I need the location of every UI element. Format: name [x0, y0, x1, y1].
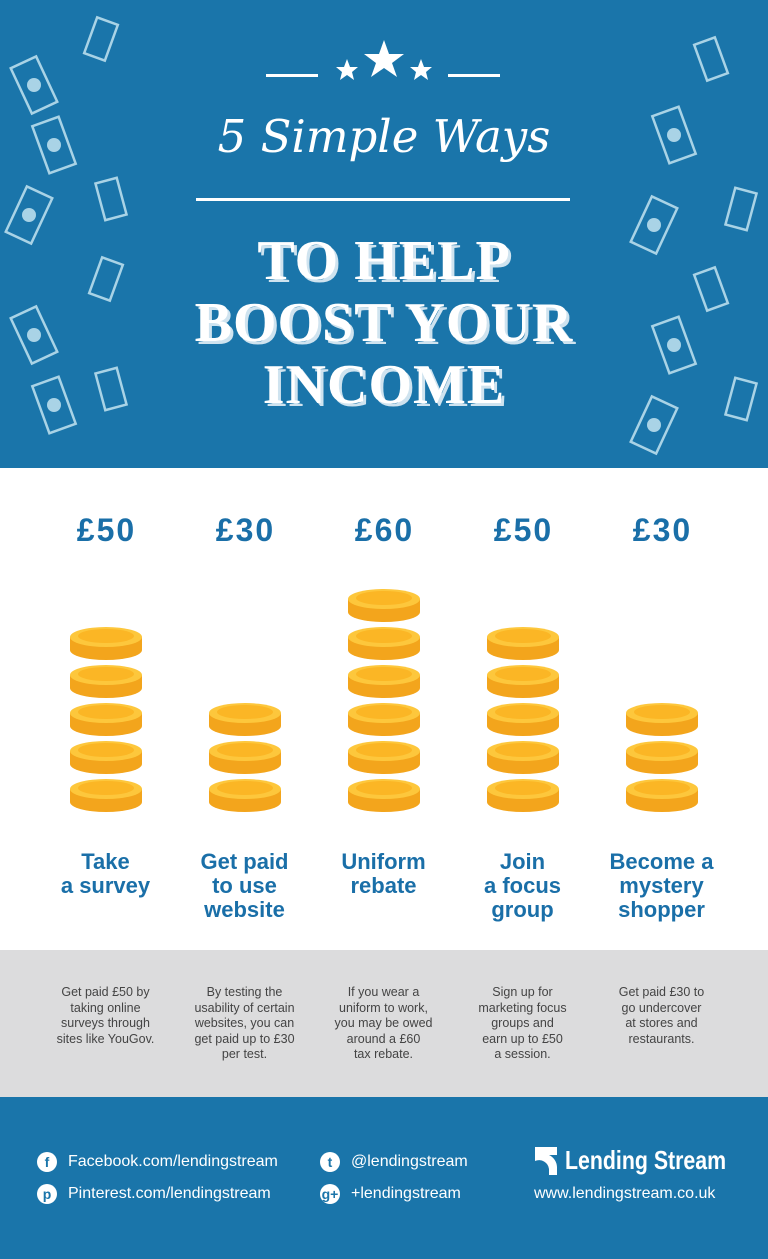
pinterest: [37, 1184, 57, 1204]
text: uniform to work,: [339, 1000, 428, 1014]
text: £60: [355, 512, 414, 548]
text: taking online: [70, 1000, 141, 1014]
text: £30: [216, 512, 275, 548]
text: get paid up to £30: [194, 1032, 295, 1046]
google plus: [320, 1184, 340, 1204]
text: website: [204, 897, 285, 922]
footer: [0, 1097, 768, 1259]
footer: Pinterest.com/lendingstream: [68, 1185, 271, 1202]
text: By testing the: [207, 985, 282, 999]
logo: Lending Stream: [565, 1145, 726, 1175]
text: £50: [494, 512, 553, 548]
text: rebate: [350, 873, 417, 898]
text: Get paid: [200, 849, 288, 874]
stars ornament: [266, 40, 500, 80]
text: £30: [633, 512, 692, 548]
facebook: f: [45, 1154, 49, 1170]
google plus: g+: [322, 1186, 338, 1202]
pinterest: p: [43, 1186, 51, 1202]
text: groups and: [491, 1016, 554, 1030]
text: group: [491, 897, 554, 922]
text: to use: [212, 873, 277, 898]
text: marketing focus: [478, 1000, 567, 1014]
text: at stores and: [625, 1016, 698, 1030]
labels: a survey: [61, 873, 150, 898]
footer: @lendingstream: [351, 1153, 468, 1170]
text: a session.: [494, 1047, 551, 1061]
text: Get paid £50 by: [61, 985, 150, 999]
text: Become a: [610, 849, 713, 874]
labels: Take: [81, 849, 130, 874]
main title: TO HELP: [257, 230, 511, 292]
labels: [61, 849, 150, 898]
description band: [0, 950, 768, 1097]
text: you may be owed: [334, 1016, 432, 1030]
prices: £50: [77, 512, 136, 548]
text: surveys through: [61, 1016, 150, 1030]
coin stacks chart: [70, 589, 698, 812]
decorative money bills: [4, 16, 758, 456]
twitter: t: [328, 1154, 332, 1170]
text: Uniform: [341, 849, 426, 874]
text: sites like YouGov.: [57, 1032, 154, 1046]
twitter: [320, 1152, 340, 1172]
text: per test.: [222, 1047, 267, 1061]
text: usability of certain: [194, 1000, 295, 1014]
footer: +lendingstream: [351, 1185, 461, 1202]
text: earn up to £50: [482, 1032, 563, 1046]
text: websites, you can: [195, 1016, 294, 1030]
text: If you wear a: [348, 985, 419, 999]
website: www.lendingstream.co.uk: [534, 1185, 715, 1202]
text: around a £60: [347, 1032, 420, 1046]
text: tax rebate.: [354, 1047, 413, 1061]
text: Get paid £30 to: [619, 985, 704, 999]
text: Sign up for: [492, 985, 553, 999]
main title: INCOME: [263, 354, 505, 416]
main title: [195, 230, 576, 416]
main title: BOOST YOUR: [195, 292, 573, 354]
header banner: [0, 0, 768, 468]
text: shopper: [618, 897, 705, 922]
facebook: [37, 1152, 57, 1172]
subtitle: 5 Simple Ways: [218, 110, 550, 163]
text: mystery: [619, 873, 704, 898]
text: a focus: [484, 873, 561, 898]
text: restaurants.: [628, 1032, 694, 1046]
text: Join: [500, 849, 545, 874]
footer: Facebook.com/lendingstream: [68, 1153, 278, 1170]
text: go undercover: [622, 1000, 701, 1014]
